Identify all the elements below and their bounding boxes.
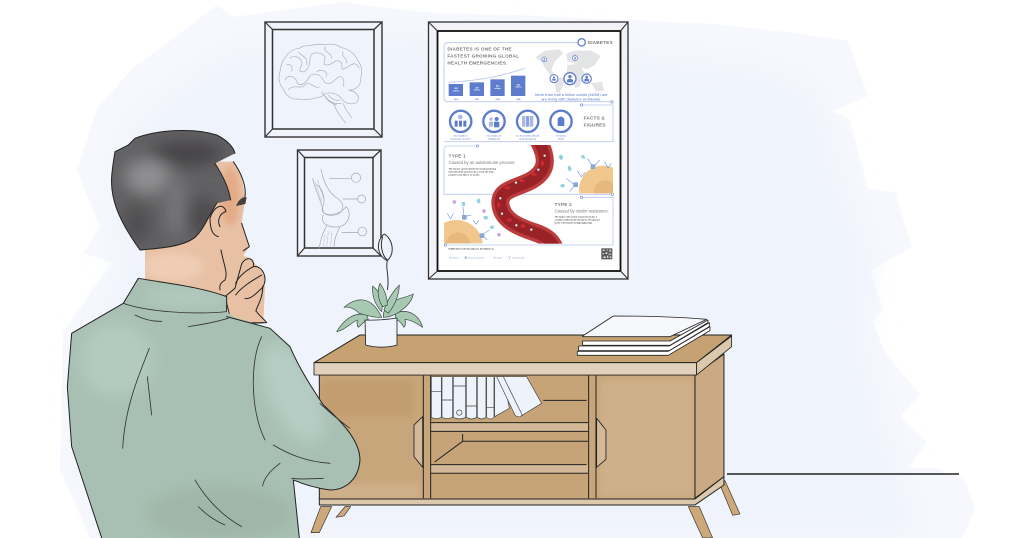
cabinet side — [695, 354, 724, 498]
bar chart: 2013 — [475, 99, 480, 101]
frame: knee — [298, 150, 381, 256]
facts captions: deaths — [558, 137, 565, 140]
poster lower section — [444, 144, 614, 260]
icons: people on map — [542, 55, 591, 85]
bar chart: 642 — [517, 83, 521, 86]
poster heading: HEALTH EMERGENCIES. — [447, 60, 508, 65]
facts heading: FACTS & — [584, 115, 605, 120]
shelf compartment — [423, 376, 596, 498]
type 2 text: levels in the blood rise (hyperglycemia). — [555, 222, 593, 225]
section border: facts — [444, 105, 613, 142]
type 1 text: The immune system attacks the insulin-producing — [449, 167, 497, 170]
cell: type 1 — [559, 154, 613, 194]
frame: brain — [265, 22, 382, 137]
sideboard — [311, 316, 740, 538]
facts captions: 1 in 6 live births affected — [516, 134, 540, 137]
bar chart: million — [515, 87, 522, 89]
section border: header — [444, 43, 611, 102]
facts captions: 6.7 million — [556, 135, 567, 137]
facts captions: low-income countries — [450, 137, 472, 140]
cabinet top — [314, 335, 732, 363]
bar chart: million — [453, 90, 460, 92]
bar chart: 2010 — [454, 99, 459, 101]
poster top section — [444, 39, 613, 142]
poster — [428, 22, 628, 279]
facts captions: 1 in 2 adults are — [486, 134, 502, 137]
plant — [337, 234, 423, 347]
cabinet front — [319, 375, 695, 500]
bar chart: 463 — [496, 85, 500, 88]
poster frame — [428, 22, 628, 279]
skin: neck and face — [143, 162, 265, 323]
facts heading — [584, 115, 606, 127]
books on shelf — [431, 377, 542, 419]
legend: Insulin receptor — [512, 256, 525, 259]
type 1 text — [449, 153, 515, 177]
plant leaves — [337, 283, 423, 332]
facts icons — [450, 111, 572, 132]
legend: Insulin — [497, 257, 502, 259]
type 2 text: Caused by insulin resistance: — [555, 209, 609, 214]
type 1 text: Caused by an autoimmune process: — [449, 160, 515, 165]
type 1 text: beta cells of the pancreas. As a result, the body — [449, 170, 494, 173]
type 2 text: The body's cells cannot respond to insulin, a — [555, 216, 598, 219]
type 2 text — [555, 202, 609, 225]
stack of magazines — [577, 316, 710, 355]
callout: half a billion adults: More than half a billion adults (463M) are — [535, 92, 608, 97]
plant pot — [365, 318, 397, 347]
callout: half a billion adults — [535, 92, 608, 101]
type 1 text: TYPE 1 — [449, 153, 466, 158]
poster heading — [447, 46, 519, 65]
bar chart — [449, 68, 525, 101]
facts captions — [450, 134, 567, 140]
cabinet top front edge — [314, 363, 697, 375]
man — [67, 130, 360, 538]
bar chart: 2040 — [516, 98, 521, 101]
poster heading: FASTEST GROWING GLOBAL — [447, 53, 519, 58]
callout: half a billion adults: are living with diabetes worldwide. — [541, 96, 601, 101]
bar chart: million — [494, 88, 502, 90]
bar chart: 387 — [475, 87, 480, 89]
eyebrow — [236, 197, 247, 206]
bar chart: 382 — [454, 88, 459, 90]
floor line — [727, 473, 959, 475]
legend: Glucose transporter — [468, 256, 484, 259]
poster heading: DIABETES IS ONE OF THE — [447, 46, 512, 51]
icon: QR code — [601, 248, 612, 259]
hand — [225, 259, 267, 323]
icon: knee sketch — [313, 169, 367, 248]
bar chart: 2030 — [495, 99, 501, 101]
logo: diabetes: DIABETES — [588, 40, 613, 45]
hair — [112, 130, 235, 250]
world map — [535, 49, 604, 93]
blood vessel — [497, 141, 555, 248]
front legs — [311, 507, 713, 538]
type 1 text: produces very little or no insulin. — [449, 174, 480, 177]
cabinet base rail — [319, 477, 724, 505]
bar chart: million — [474, 90, 481, 92]
logo: diabetes — [578, 39, 613, 46]
cell: type 2 — [444, 198, 501, 244]
face lines — [210, 162, 249, 290]
legend — [449, 256, 525, 259]
section border: type 1 and 2 — [444, 146, 613, 245]
facts captions: during pregnancy — [519, 137, 537, 140]
facts captions: 4 in 5 adults in — [454, 134, 468, 137]
legend: Glucose — [452, 257, 459, 259]
facts captions: undiagnosed — [488, 138, 501, 140]
plant stem and bud — [378, 234, 392, 290]
icon: brain sketch — [279, 44, 362, 123]
footnote: ID Materials for Life: ID, booth.com, bas Diabetes.ac — [449, 248, 494, 251]
rear legs — [336, 481, 740, 517]
type 2 text: TYPE 2 — [555, 202, 572, 207]
shirt — [67, 278, 360, 538]
type 2 text: condition called insulin resistance. The glucose — [555, 219, 601, 222]
facts heading: FIGURES — [584, 122, 606, 127]
cabinet door handles — [414, 417, 606, 467]
